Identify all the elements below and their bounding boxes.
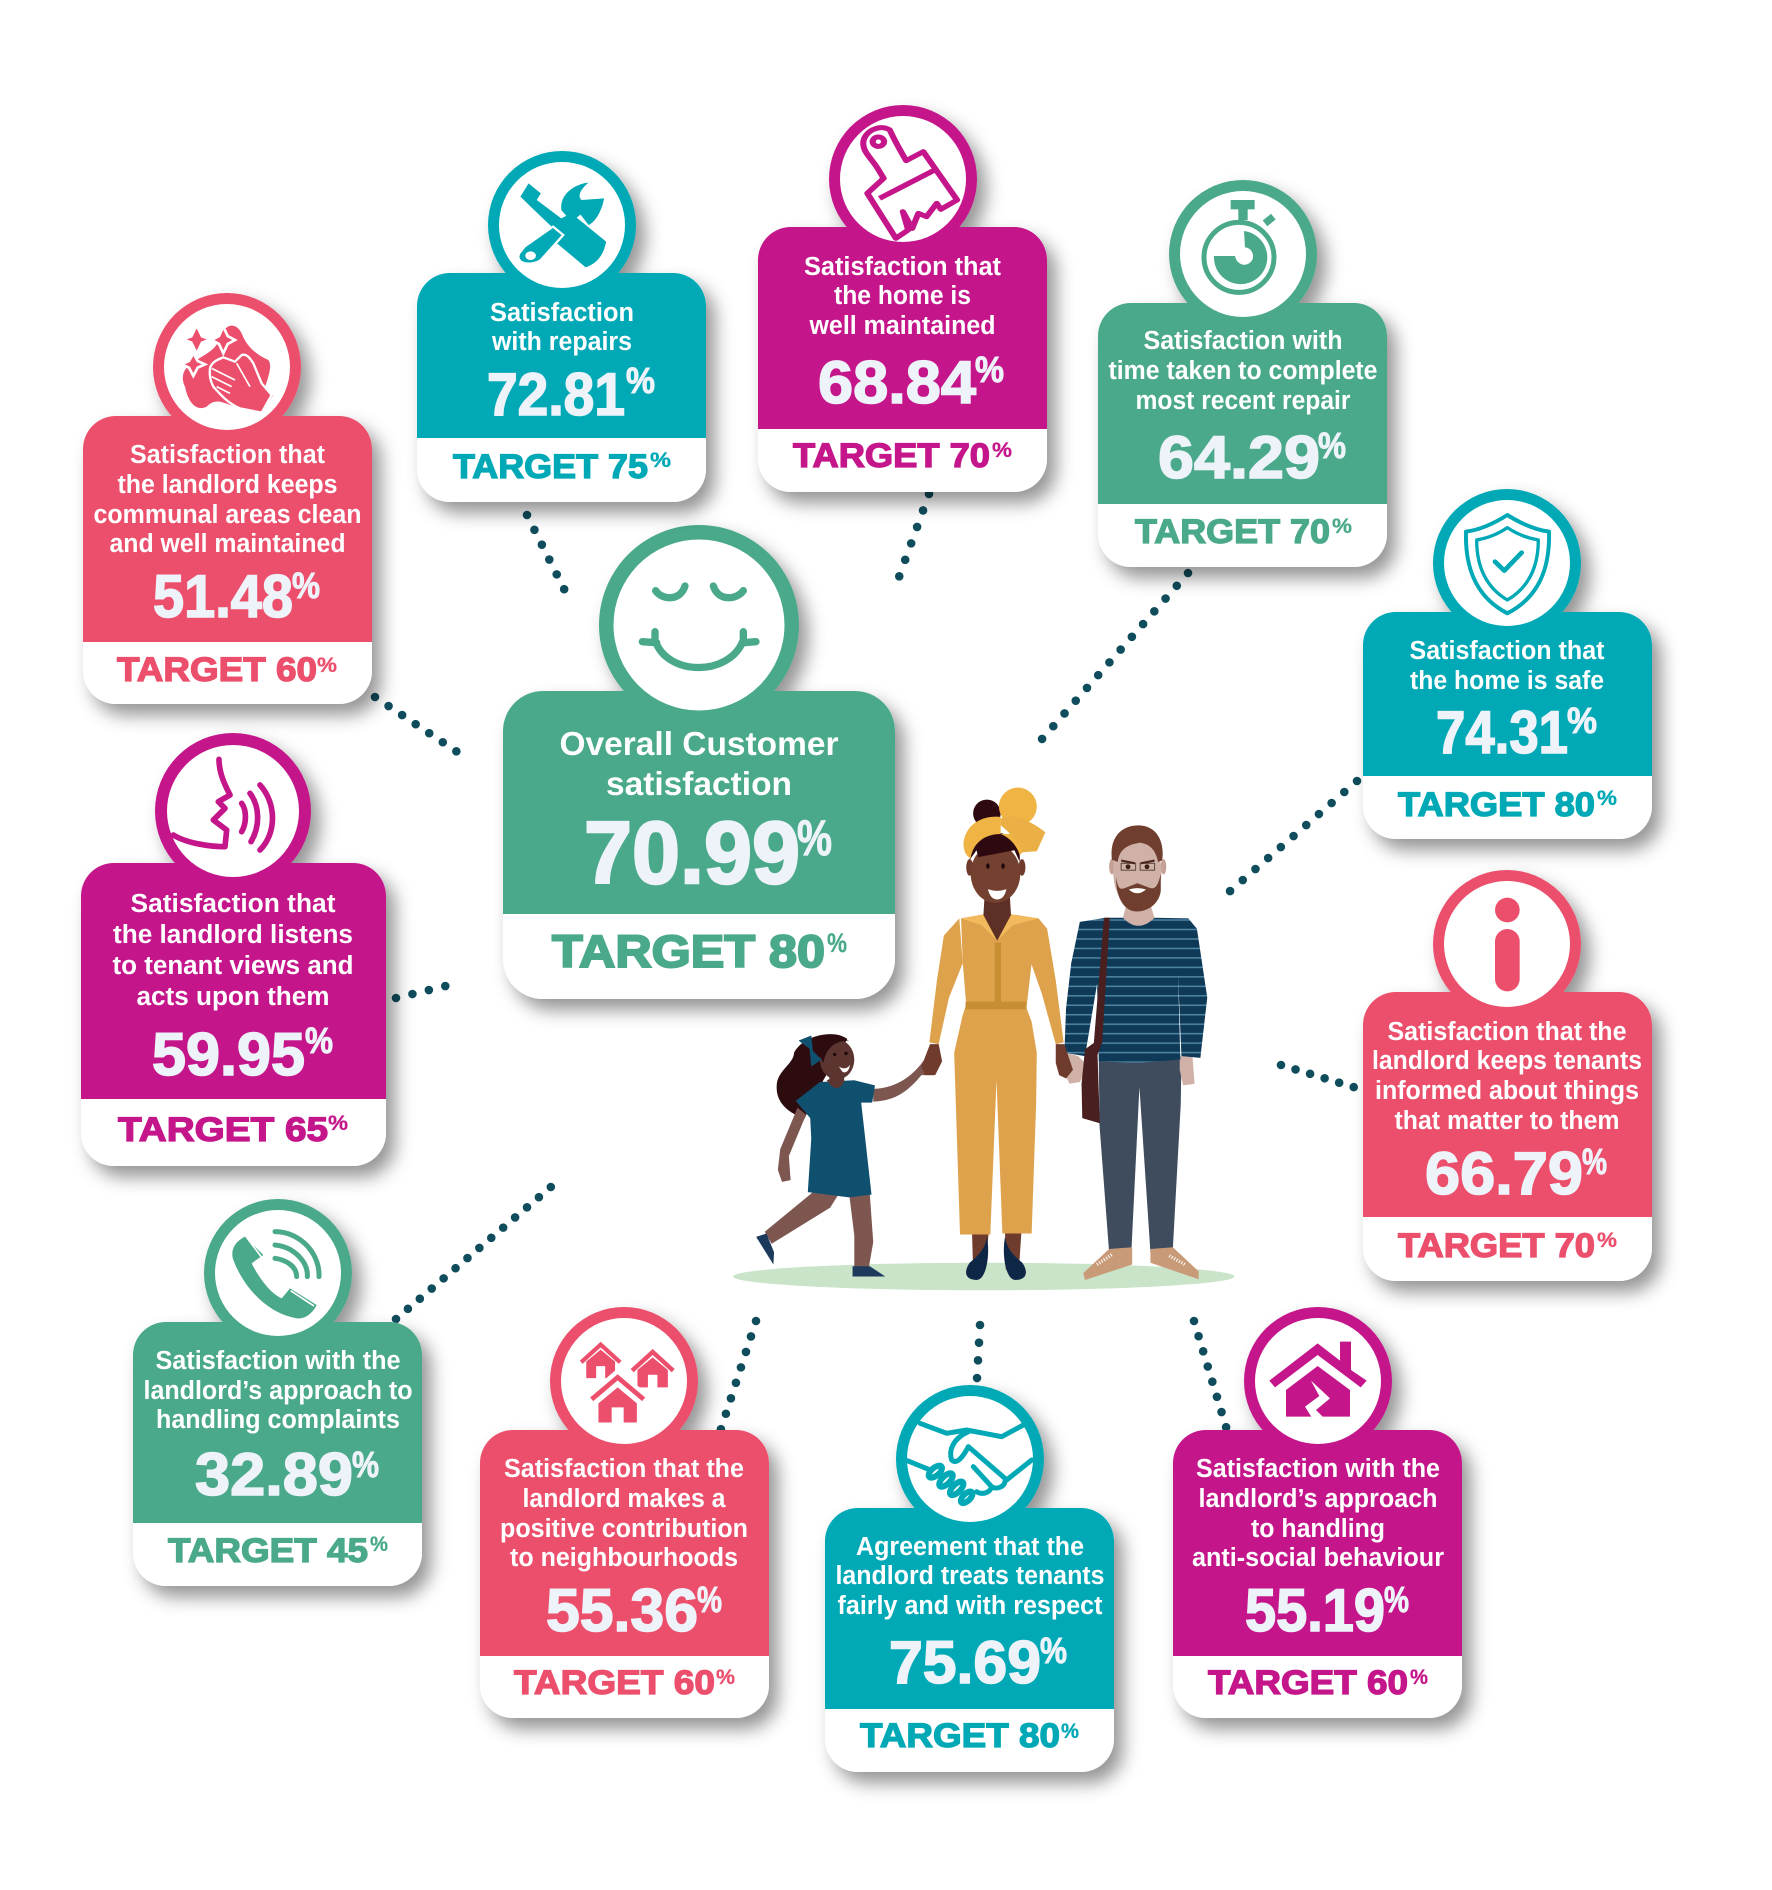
label (1410, 637, 1605, 695)
icon: telephone (232, 1232, 319, 1318)
value: 55.19%: % (1384, 1579, 1409, 1620)
target: 80%: % (1597, 787, 1617, 810)
icon: stopwatch (1204, 200, 1274, 292)
icon: crossed screwdriver and hammer (518, 183, 606, 267)
target: 70%: % (1332, 515, 1352, 538)
label: to handling (1251, 1515, 1385, 1543)
label: positive contribution (500, 1515, 748, 1543)
illustration: family of three (733, 788, 1234, 1290)
label: the home is safe (1410, 667, 1604, 695)
label (1192, 1455, 1444, 1572)
value: 66.79%: 66.79 (1425, 1140, 1583, 1207)
panel: communal areas (83, 293, 372, 704)
label: Satisfaction with the (1196, 1455, 1440, 1483)
target: 60%: % (1410, 1666, 1428, 1689)
value: 74.31%: 74.31 (1436, 699, 1568, 766)
label: Satisfaction that (130, 890, 336, 918)
label: with repairs (491, 328, 632, 356)
label: landlord’s approach to (144, 1377, 412, 1405)
value: 59.95%: 59.95 (152, 1021, 305, 1088)
figure: woman (921, 788, 1073, 1280)
dotted connectors (375, 494, 1357, 1430)
icon: smiling face (642, 586, 756, 667)
target: 80%: % (827, 928, 847, 958)
target: 70%: TARGET 70 (793, 437, 990, 475)
label: communal areas clean (94, 501, 362, 529)
label: informed about things (1375, 1077, 1639, 1105)
label: Satisfaction that (804, 253, 1001, 281)
panel: complaints (133, 1199, 422, 1586)
label: fairly and with respect (838, 1592, 1103, 1620)
value: 32.89%: 32.89 (195, 1441, 353, 1508)
label: landlord’s approach (1198, 1485, 1438, 1513)
panel: anti-social behaviour (1173, 1307, 1462, 1718)
label: that matter to them (1394, 1107, 1620, 1135)
value: 68.84%: % (975, 349, 1004, 390)
value: 66.79%: % (1582, 1141, 1607, 1182)
panel: home is safe (1363, 489, 1652, 839)
value: 75.69%: % (1040, 1630, 1067, 1671)
target: 70%: TARGET 70 (1398, 1227, 1595, 1265)
heading: overall customer satisfaction: Overall Customer (560, 725, 839, 762)
label: Satisfaction (490, 299, 634, 327)
target: 75%: % (650, 449, 671, 472)
target: 60%: % (317, 654, 337, 677)
label: Satisfaction with (1144, 327, 1342, 355)
target: 65%: % (328, 1112, 348, 1135)
value: 51.48%: % (292, 565, 320, 606)
target: 70%: % (1597, 1229, 1617, 1252)
panel: landlord listens (81, 733, 386, 1166)
target: 65%: TARGET 65 (118, 1111, 328, 1149)
icon: three houses (581, 1345, 673, 1423)
label (144, 1347, 412, 1434)
value: 32.89%: % (352, 1444, 379, 1485)
label: most recent repair (1136, 387, 1351, 415)
label: anti-social behaviour (1192, 1544, 1444, 1572)
icon: information (1495, 898, 1520, 991)
figure: man (1064, 825, 1207, 1280)
target: 60%: % (716, 1666, 735, 1689)
target: 60%: TARGET 60 (117, 651, 317, 689)
icon: cracked house (1269, 1342, 1367, 1417)
value: 59.95%: % (305, 1020, 333, 1061)
panel: home well maintained (758, 105, 1047, 492)
label: landlord makes a (522, 1485, 726, 1513)
value: 74.31%: % (1567, 700, 1597, 741)
target: 80%: TARGET 80 (552, 926, 825, 977)
label: and well maintained (110, 530, 346, 558)
value: 70.99%: % (797, 810, 832, 866)
value: 75.69%: 75.69 (889, 1629, 1041, 1696)
icon: shield with check (1466, 515, 1549, 613)
target: 60%: TARGET 60 (514, 1664, 715, 1702)
label: the home is (834, 282, 971, 310)
label: time taken to complete (1108, 357, 1378, 385)
label: Satisfaction that the (1388, 1018, 1626, 1046)
value: 70.99%: 70.99 (584, 803, 800, 902)
target: 45%: TARGET 45 (168, 1532, 368, 1570)
ground ellipse (733, 1263, 1234, 1290)
value: 72.81%: % (626, 360, 655, 401)
target: 80%: % (1061, 1720, 1079, 1743)
value: 55.36%: % (697, 1579, 722, 1620)
heading: overall customer satisfaction (560, 725, 839, 802)
label: handling complaints (156, 1406, 400, 1434)
panel: repairs (417, 151, 706, 502)
label: landlord treats tenants (836, 1562, 1104, 1590)
icon: paint brush (863, 128, 957, 238)
target: 80%: TARGET 80 (1398, 786, 1595, 824)
target: 80%: TARGET 80 (860, 1717, 1060, 1755)
icon: wiping hand (182, 326, 273, 413)
label: Agreement that the (856, 1533, 1084, 1561)
label: Satisfaction with the (156, 1347, 400, 1375)
value: 55.36%: 55.36 (546, 1577, 698, 1644)
heading: overall customer satisfaction: satisfaction (606, 765, 792, 802)
label: to neighbourhoods (510, 1544, 738, 1572)
label: the landlord listens (113, 921, 353, 949)
label: the landlord keeps (118, 471, 338, 499)
label (1108, 327, 1378, 415)
value: 64.29%: 64.29 (1158, 424, 1320, 491)
label (112, 890, 354, 1011)
panel: overall customer satisfaction (503, 525, 895, 999)
value: 72.81%: 72.81 (487, 361, 625, 428)
target: 70%: TARGET 70 (1135, 513, 1330, 551)
target: 70%: % (992, 439, 1012, 462)
label: Satisfaction that (130, 441, 325, 469)
label: acts upon them (136, 983, 330, 1011)
value: 55.19%: 55.19 (1245, 1577, 1385, 1644)
target: 75%: TARGET 75 (453, 448, 648, 486)
value: 51.48%: 51.48 (153, 563, 293, 630)
label: well maintained (809, 312, 996, 340)
panel: keeps tenants informed (1363, 870, 1652, 1281)
icon: speaking head (173, 759, 272, 850)
label (836, 1533, 1104, 1620)
label: landlord keeps tenants (1372, 1047, 1642, 1075)
label: Satisfaction that (1410, 637, 1605, 665)
value: 64.29%: % (1318, 425, 1346, 466)
label (1372, 1018, 1642, 1135)
icon: handshake (907, 1423, 1032, 1505)
value: 68.84%: 68.84 (818, 349, 977, 416)
label (500, 1455, 748, 1572)
label (490, 299, 634, 356)
figure: girl (756, 1034, 940, 1277)
panel: neighbourhoods (480, 1307, 769, 1718)
label (94, 441, 362, 558)
label: to tenant views and (112, 952, 354, 980)
target: 45%: % (370, 1533, 388, 1556)
label: Satisfaction that the (504, 1455, 744, 1483)
panel: repair time (1098, 180, 1387, 567)
label (804, 253, 1001, 340)
panel: fairness and respect (825, 1385, 1114, 1772)
target: 60%: TARGET 60 (1208, 1664, 1408, 1702)
